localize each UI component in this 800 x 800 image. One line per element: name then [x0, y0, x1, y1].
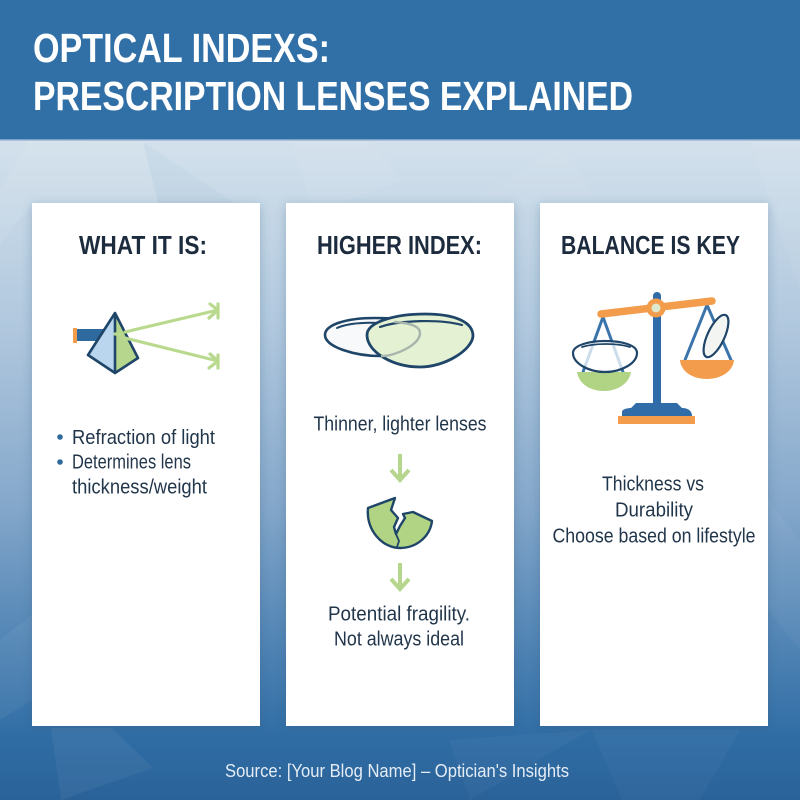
heading: balance is key: BALANCE IS KEY: [561, 230, 740, 260]
text: potential fragility: Not always ideal: [334, 628, 464, 650]
heading: higher index: HIGHER INDEX:: [317, 230, 482, 260]
icon: balance scale: [573, 292, 734, 424]
bullet list: Determines lens: [72, 452, 191, 474]
text: potential fragility: Potential fragility.: [328, 604, 470, 626]
text: thickness vs durability: [552, 474, 756, 548]
icon: cracked lens: [368, 498, 432, 548]
title: OPTICAL INDEXS:: [33, 25, 330, 71]
heading: what it is: WHAT IT IS:: [79, 230, 207, 260]
source line: Source: [Your Blog Name] – Optician's Insights: [225, 760, 569, 781]
panel: what it is: [32, 203, 260, 726]
bullet list: [57, 427, 215, 498]
bullet list: Refraction of light: [72, 427, 215, 449]
header band: [0, 0, 800, 140]
bullet list: thickness/weight: [72, 476, 207, 498]
icon: prism refracting light: [73, 304, 218, 373]
text: thickness vs durability: Durability: [615, 500, 693, 522]
panel: balance is key: [540, 203, 768, 726]
text: potential fragility: [328, 604, 470, 650]
text: thinner, lighter lenses: Thinner, lighter lenses: [314, 414, 486, 436]
title: [33, 25, 633, 119]
text: thickness vs durability: Thickness vs: [602, 474, 704, 496]
panel: higher index: [286, 203, 514, 726]
icon: overlapping lenses: [325, 314, 473, 367]
arrow: down: [391, 454, 409, 480]
arrow: down: [391, 563, 409, 589]
title: PRESCRIPTION LENSES EXPLAINED: [33, 73, 633, 119]
text: thickness vs durability: Choose based on lifestyle: [552, 526, 756, 548]
